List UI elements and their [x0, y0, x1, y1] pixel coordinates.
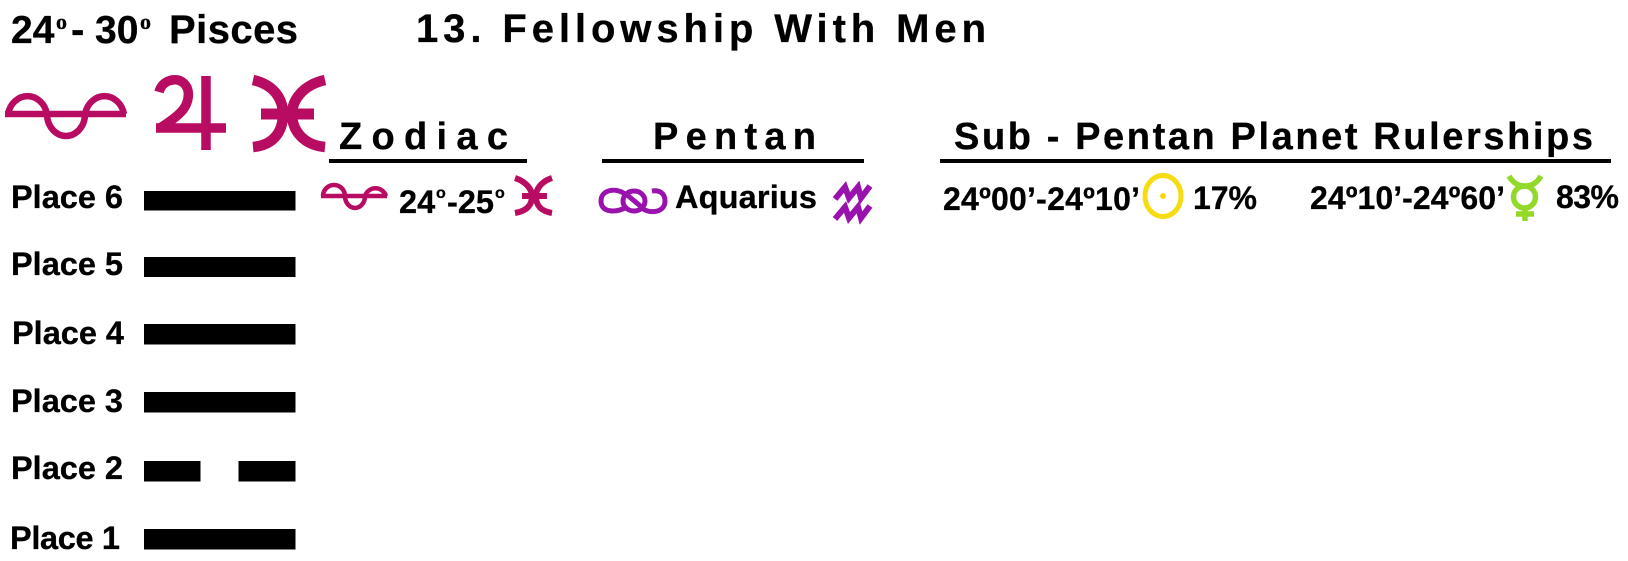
icon: large wave glyph: [5, 96, 126, 136]
place 4: [12, 315, 296, 351]
icon: small wave: [321, 185, 387, 208]
panel: sub-pentan planet rulerships: [940, 116, 1619, 221]
place 3: Place 3: [11, 383, 123, 419]
heading: degree range: [11, 8, 298, 52]
pentan sign name: Aquarius: [675, 179, 817, 215]
heading: sub-pentan: Sub - Pentan Planet Rulerships: [954, 116, 1593, 158]
zodiac degrees: 24: [399, 184, 435, 220]
heading: degree range: -: [71, 8, 84, 52]
place 6: Place 6: [11, 179, 123, 215]
first range: 24º00’-24º10’: [943, 181, 1140, 217]
panel: zodiac: [321, 116, 552, 220]
icon: linked rings: [601, 190, 665, 212]
second range: 24º10’-24º60’: [1310, 180, 1505, 216]
zodiac degrees: o: [495, 185, 505, 202]
zodiac degrees: o: [436, 185, 446, 202]
heading: pentan: Pentan: [653, 116, 816, 158]
second percentage: 83%: [1556, 179, 1619, 215]
icon: Aquarius: [835, 186, 870, 219]
place 1: [10, 520, 296, 556]
zodiac degrees: [399, 184, 505, 220]
icon: Mercury: [1509, 176, 1541, 221]
icon: small Pisces: [515, 178, 552, 213]
title: 13. Fellowship With Men: [416, 7, 986, 51]
place 5: [11, 246, 296, 282]
zodiac degrees: -25: [447, 184, 494, 220]
panel: pentan: [601, 116, 870, 219]
heading: degree range: 24: [11, 9, 55, 52]
place 3: [11, 383, 296, 419]
place 6: [11, 179, 296, 215]
icon: Jupiter: [156, 76, 226, 150]
place 5: Place 5: [11, 246, 123, 282]
place 1: Place 1: [10, 520, 120, 556]
heading: degree range: o: [56, 9, 67, 34]
heading: degree range: Pisces: [169, 8, 298, 52]
place 2: Place 2: [11, 450, 123, 486]
heading: degree range: o: [140, 9, 151, 34]
place 4: Place 4: [12, 315, 124, 351]
hexagram lines and place labels: [10, 179, 296, 556]
icon: Sun: [1145, 176, 1181, 216]
heading: degree range: 30: [95, 9, 138, 52]
icon: Pisces: [253, 80, 325, 147]
first percentage: 17%: [1193, 180, 1257, 216]
place 2: [11, 450, 296, 486]
heading: zodiac: Zodiac: [339, 116, 508, 158]
